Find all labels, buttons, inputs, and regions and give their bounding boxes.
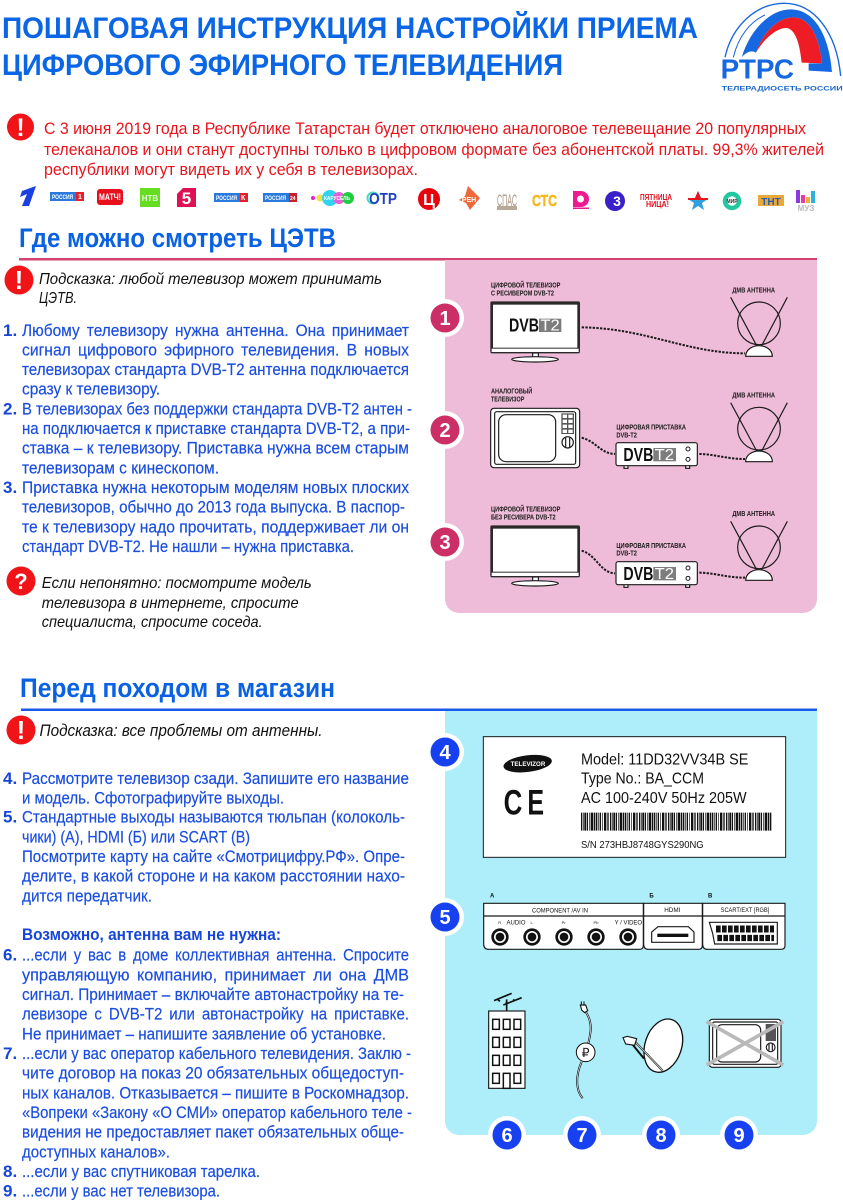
label: паспортная табличка: S/N 273HBJ8748GYS290NG: [581, 840, 704, 851]
diagram 3: ДМВ АНТЕННА: [732, 511, 775, 518]
diagram 2: ЦИФРОВАЯ ПРИСТАВКА: [616, 424, 686, 431]
panel: что смотреть на телевизоре: [426, 711, 817, 1154]
list: пункты 6-9: видения не предоставляет пакет обязательных обще-: [22, 1124, 404, 1142]
diagram 1: [490, 281, 787, 362]
icons 6-9: [489, 993, 783, 1098]
list: пункты 1-3: телевизорам с кинескопом.: [22, 459, 219, 477]
list: пункты 6-9: управляющую компанию, принимает ли она ДМВ: [22, 966, 409, 984]
badge 1: [426, 299, 464, 337]
badge 7: 7: [576, 1125, 588, 1147]
diagram 2: DVB-T2: [616, 432, 637, 439]
channel: Россия 24: [263, 193, 297, 202]
announcement text: [44, 119, 824, 179]
diagram 2: ДМВ АНТЕННА: [732, 392, 775, 399]
tip: если непонятно: специалиста, спросите соседа.: [42, 614, 263, 631]
channel: ТВ3: 3: [613, 193, 621, 209]
badge 8: [642, 1116, 680, 1154]
list: пункты 6-9: ...если у вас спутниковая тарелка.: [22, 1163, 260, 1181]
list: пункты 1-3: В телевизорах без поддержки стандарта DVB-T2 антен -: [22, 400, 412, 418]
ports: Б: [649, 893, 654, 899]
badge 4: 4: [439, 742, 451, 764]
diagram 3: DVB: [623, 563, 653, 584]
list: пункты 4-5: Посмотрите карту на сайте «Смотрицифру.РФ». Опре-: [22, 848, 405, 866]
diagram 1: С РЕСИВЕРОМ DVB-T2: [491, 291, 554, 298]
channel: Звезда: [688, 191, 708, 210]
tip: любой телевизор: !: [15, 265, 23, 295]
port: тюльпан: AUDIO: [507, 920, 526, 926]
icon: кабель и рубль: ₽: [582, 1046, 590, 1060]
badge 7: [563, 1116, 601, 1154]
diagram 2: T2: [655, 447, 674, 464]
channel: ТВ3: [605, 191, 625, 211]
channel: Россия К: [214, 193, 248, 202]
badge 2: 2: [439, 420, 451, 442]
channel: ТВ Центр: Ц: [423, 192, 435, 209]
list: пункты 4-5: 4.: [3, 769, 17, 788]
channel: НТВ: НТВ: [142, 194, 158, 203]
announcement text: С 3 июня 2019 года в Республике Татарстан будет отключено аналоговое телевещание 20 популярных: [44, 119, 806, 138]
channel: Россия 1: РОССИЯ: [52, 195, 73, 201]
channel: СТС: СТС: [532, 193, 557, 210]
diagram 3: БЕЗ РЕСИВЕРА DVB-T2: [491, 514, 556, 521]
badge 3: [426, 523, 464, 561]
channel: Спас: [497, 191, 517, 210]
channel: Россия 24: РОССИЯ: [265, 196, 286, 202]
channel: Муз ТВ: [796, 190, 815, 213]
port: тюльпан: Pr: [562, 920, 566, 925]
label: паспортная табличка: AC 100-240V 50Hz 205W: [581, 790, 747, 807]
port: SCART: [703, 903, 785, 949]
ports: [484, 893, 785, 949]
heading: где можно смотреть: Где можно смотреть ЦЭТВ: [19, 223, 336, 253]
list: пункты 1-3: сразу к телевизору.: [22, 381, 160, 399]
port: HDMI: [644, 903, 702, 949]
list: пункты 6-9: 8.: [3, 1162, 17, 1181]
TV label and ports: [483, 737, 786, 949]
channel: Россия К: РОССИЯ: [216, 196, 237, 202]
diagram 1: ДМВ АНТЕННА: [732, 288, 775, 295]
channel: ТНТ: ТНТ: [761, 197, 781, 208]
badge 8: 8: [655, 1125, 667, 1147]
port: HDMI: HDMI: [664, 907, 681, 914]
list: пункты 6-9: левизоре с DVB-T2 или автонастройку на приставке.: [22, 1006, 409, 1024]
diagram 1: DVB: [509, 315, 539, 336]
port: тюльпан: Pb: [594, 920, 599, 925]
list: пункты 1-3: те к телевизору надо прочитать, поддерживает ли он: [22, 518, 409, 536]
diagram 2: DVB: [623, 444, 653, 465]
icon: exclamation: !: [16, 114, 25, 142]
list: пункты 6-9: [3, 946, 412, 1200]
list: пункты 1-3: Приставка нужна некоторым моделям новых плоских: [22, 479, 410, 497]
ports: В: [708, 893, 713, 899]
title: [2, 11, 698, 82]
channel: ОТР: ОТР: [369, 191, 397, 208]
diagram 2: [491, 387, 787, 468]
channel logos: СПАС: [497, 191, 517, 210]
title: ПОШАГОВАЯ ИНСТРУКЦИЯ НАСТРОЙКИ ПРИЕМА: [2, 11, 698, 45]
badge 5: 5: [439, 907, 451, 929]
channel: Пятый: [177, 188, 196, 208]
badge 3: 3: [439, 532, 451, 554]
tip: если непонятно: телевизора в интернете, спросите: [42, 595, 299, 612]
list: пункты 1-3: телевизорах стандарта DVB-T2 антенна подключается: [22, 361, 409, 379]
list: пункты 6-9: сигнал. Принимает – включайте автонастройку на те-: [22, 986, 404, 1004]
port: тюльпан: L: [531, 920, 534, 925]
list: пункты 4-5: делите, в какой стороне и на каком расстоянии нахо-: [22, 868, 405, 886]
diagram 1: T2: [540, 318, 560, 335]
list: пункты 4-5: Стандартные выходы называются тюльпан (колоколь-: [22, 809, 405, 827]
channel: Россия 1: 1: [78, 194, 82, 201]
list: пункты 4-5: 5.: [3, 808, 17, 827]
list: пункты 1-3: сигнал цифрового эфирного телевидения. В новых: [22, 342, 410, 360]
label: паспортная табличка: [483, 737, 786, 857]
port: тюльпан: Y / VIDEO: [615, 920, 642, 926]
diagram 1: ЦИФРОВОЙ ТЕЛЕВИЗОР: [491, 281, 561, 290]
channel: Карусель: [311, 190, 354, 206]
list: пункты 1-3: 1.: [3, 321, 17, 340]
channel: РЕН ТВ: [459, 186, 480, 210]
panel: схемы подключения: [426, 260, 817, 613]
label: паспортная табличка: TELEVIZOR: [511, 761, 546, 768]
list: пункты 4-5: чики) (А), HDMI (Б) или SCART (В): [22, 828, 250, 846]
channel: Матч: МАТЧ!: [99, 192, 121, 202]
tip: любой телевизор: [4, 265, 382, 307]
channel: Пятница: ПЯТНИЦА: [640, 193, 672, 202]
tip: если непонятно: Если непонятно: посмотрите модель: [42, 575, 312, 592]
channel: Первый: [20, 186, 36, 206]
channel: Муз ТВ: МУЗ: [798, 204, 814, 213]
icon: многоквартирный дом: [489, 993, 525, 1088]
icon: старый телевизор перечёркнутый: [707, 1019, 783, 1067]
channel: Россия 1: [50, 192, 84, 201]
list: пункты 1-3: Любому телевизору нужна антенна. Она принимает: [22, 322, 409, 340]
list: пункты 4-5: [3, 769, 409, 905]
channel: Мир: МИР: [726, 199, 738, 205]
tip: все проблемы от антенны: !: [17, 715, 25, 745]
badge 5: [426, 898, 464, 936]
subheading: антенна не нужна: Возможно, антенна вам не нужна:: [22, 926, 281, 944]
list: пункты 6-9: ных каналов. Отказывается – пишите в Роскомнадзор.: [22, 1084, 409, 1102]
tip: любой телевизор: Подсказка: любой телевизор может принимать: [39, 271, 382, 288]
list: пункты 1-3: 2.: [3, 399, 17, 418]
logo: РТРС: РТРС: [721, 53, 794, 84]
heading: перед походом: Перед походом в магазин: [20, 673, 335, 703]
announcement text: республики могут видеть их у себя в телевизорах.: [44, 160, 418, 179]
channel: Пятый: 5: [182, 189, 191, 208]
channel: НТВ: [140, 188, 160, 207]
list: пункты 1-3: 3.: [3, 478, 17, 497]
icon: кабель и рубль: [576, 1001, 595, 1098]
tip: если непонятно: ?: [14, 569, 28, 594]
logo: РТРС: ТЕЛЕРАДИОСЕТЬ РОССИИ: [722, 86, 843, 93]
channel: Матч: [97, 189, 123, 205]
list: пункты 1-3: на подключается к приставке стандарта DVB-T2, а при-: [22, 420, 410, 438]
list: пункты 6-9: «Вопреки «Закону «О СМИ» оператор кабельного теле -: [22, 1104, 412, 1122]
label: паспортная табличка: Model: 11DD32VV34B SE: [581, 751, 748, 768]
icon: exclamation: [7, 114, 34, 142]
channel: Пятница: НИЦА!: [646, 200, 669, 209]
channel: Карусель: КАРУСЕЛЬ: [324, 196, 350, 202]
label: паспортная табличка: E: [527, 784, 544, 823]
tip: все проблемы от антенны: Подсказка: все проблемы от антенны.: [40, 721, 322, 740]
list: пункты 6-9: ...если у вас оператор кабельного телевидения. Заклю -: [22, 1045, 411, 1063]
port: тюльпан: [484, 903, 643, 949]
list: пункты 6-9: 6.: [3, 946, 17, 965]
list: пункты 4-5: Рассмотрите телевизор сзади. Запишите его название: [22, 770, 409, 788]
channel: ТНТ: [758, 195, 784, 208]
channel: РЕН ТВ: РЕН: [462, 197, 476, 204]
list: пункты 4-5: и модель. Сфотографируйте выходы.: [22, 789, 284, 807]
list: пункты 4-5: дится передатчик.: [22, 887, 152, 905]
list: пункты 1-3: стандарт DVB-T2. Не нашли – нужна приставка.: [22, 538, 354, 556]
list: пункты 6-9: Не принимает – напишите заявление об установке.: [22, 1025, 386, 1043]
title: ЦИФРОВОГО ЭФИРНОГО ТЕЛЕВИДЕНИЯ: [2, 49, 563, 82]
label: паспортная табличка: Type No.: BA_CCM: [581, 771, 704, 788]
badge 6: 6: [501, 1125, 513, 1147]
logo: РТРС: [721, 3, 843, 93]
badge 1: 1: [439, 308, 451, 330]
list: пункты 1-3: ставка – к телевизору. Приставка нужна всем старым: [22, 440, 409, 458]
channel: ТВ Центр: [418, 188, 440, 210]
channel: Россия К: К: [241, 195, 246, 202]
diagram 3: DVB-T2: [616, 551, 637, 558]
icon: спутниковая тарелка: [623, 1014, 689, 1077]
diagram 2: АНАЛОГОВЫЙ: [491, 387, 532, 396]
channel logos: [20, 186, 815, 213]
list: пункты 1-3: телевизоров, обычно до 2013 года выпуска. В паспор-: [22, 499, 405, 517]
diagram 3: T2: [655, 566, 674, 583]
tip: любой телевизор: ЦЭТВ.: [39, 290, 77, 307]
tip: если непонятно: [6, 566, 312, 631]
label: паспортная табличка: C: [504, 784, 522, 823]
diagram 3: ЦИФРОВОЙ ТЕЛЕВИЗОР: [491, 505, 561, 514]
channel: Пятница: [640, 193, 672, 209]
badge 4: [426, 733, 464, 771]
list: пункты 6-9: доступных каналов».: [22, 1143, 170, 1161]
tip: все проблемы от антенны: [6, 715, 322, 745]
diagram 2: ТЕЛЕВИЗОР: [491, 397, 525, 404]
badge 9: [720, 1116, 758, 1154]
channel: Россия 24: 24: [290, 196, 296, 202]
port: тюльпан: COMPONENT /AV IN: [532, 907, 588, 914]
badge 6: [488, 1116, 526, 1154]
port: тюльпан: R: [498, 920, 501, 925]
diagram 3: [490, 505, 787, 587]
channel: Домашний: [573, 191, 589, 209]
badge 2: [426, 411, 464, 449]
diagram 3: ЦИФРОВАЯ ПРИСТАВКА: [616, 543, 686, 550]
ports: А: [490, 893, 495, 899]
port: SCART: SCART/EXT [RGB]: [721, 907, 770, 914]
list: пункты 1-3: [3, 321, 412, 556]
list: пункты 6-9: чите договор на показ 20 обязательных общедоступ-: [22, 1065, 404, 1083]
channel: Мир: [725, 194, 739, 208]
list: пункты 6-9: ...если у вас в доме коллективная антенна. Спросите: [22, 947, 409, 965]
list: пункты 6-9: 7.: [3, 1044, 17, 1063]
badge 9: 9: [733, 1125, 745, 1147]
diagrams: [490, 281, 787, 587]
